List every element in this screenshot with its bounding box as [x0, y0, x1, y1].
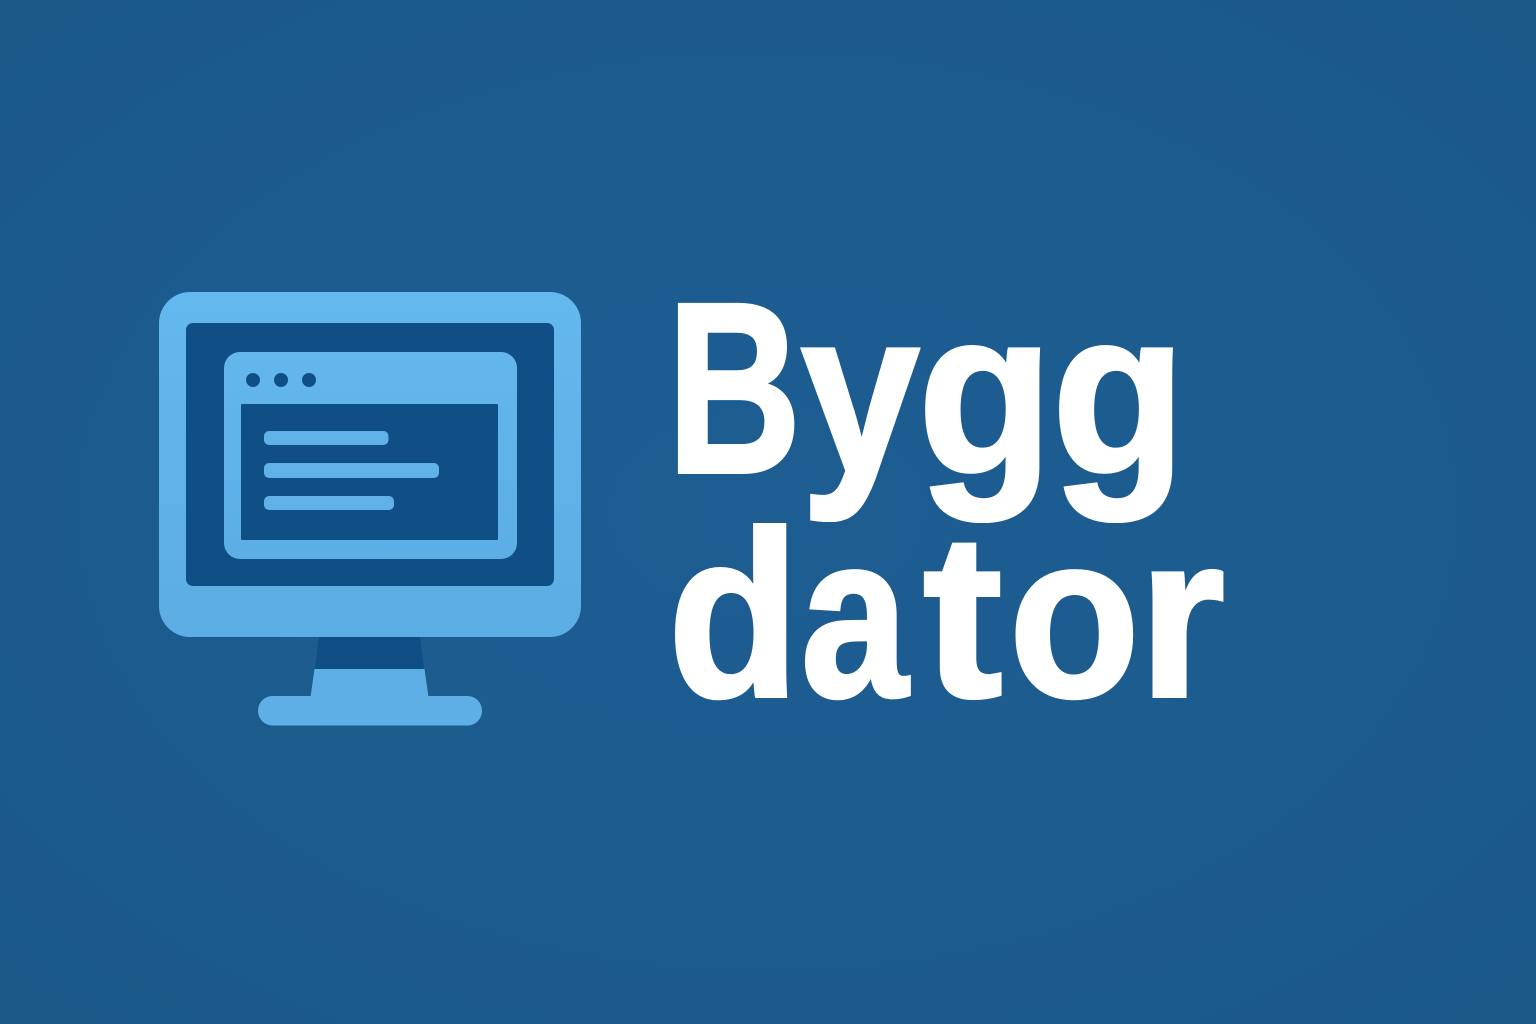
monitor neck — [315, 636, 424, 669]
title line 1 — [667, 253, 1186, 524]
title line 1: g — [1052, 263, 1186, 522]
window content pane — [241, 404, 498, 540]
browser window — [224, 352, 517, 559]
text line 1 — [264, 431, 388, 445]
window frame — [224, 352, 517, 559]
text line 2 — [264, 463, 439, 478]
title — [667, 253, 1225, 747]
monitor frame — [159, 292, 581, 637]
icon: desktop monitor — [159, 292, 581, 726]
title line 1: y — [801, 263, 920, 522]
title line 2 — [668, 483, 1225, 747]
title line 1: g — [918, 263, 1053, 522]
title line 1: B — [667, 253, 801, 524]
title line 2: d — [668, 483, 800, 747]
monitor screen — [186, 323, 554, 586]
monitor stand — [310, 669, 428, 697]
text line 3 — [264, 496, 394, 510]
title line 2: r — [1139, 487, 1225, 746]
title line 2: a — [801, 487, 908, 746]
title line 2: o — [1009, 487, 1140, 746]
title line 2: t — [923, 487, 1003, 746]
monitor base — [258, 696, 482, 726]
window dots — [246, 373, 316, 387]
